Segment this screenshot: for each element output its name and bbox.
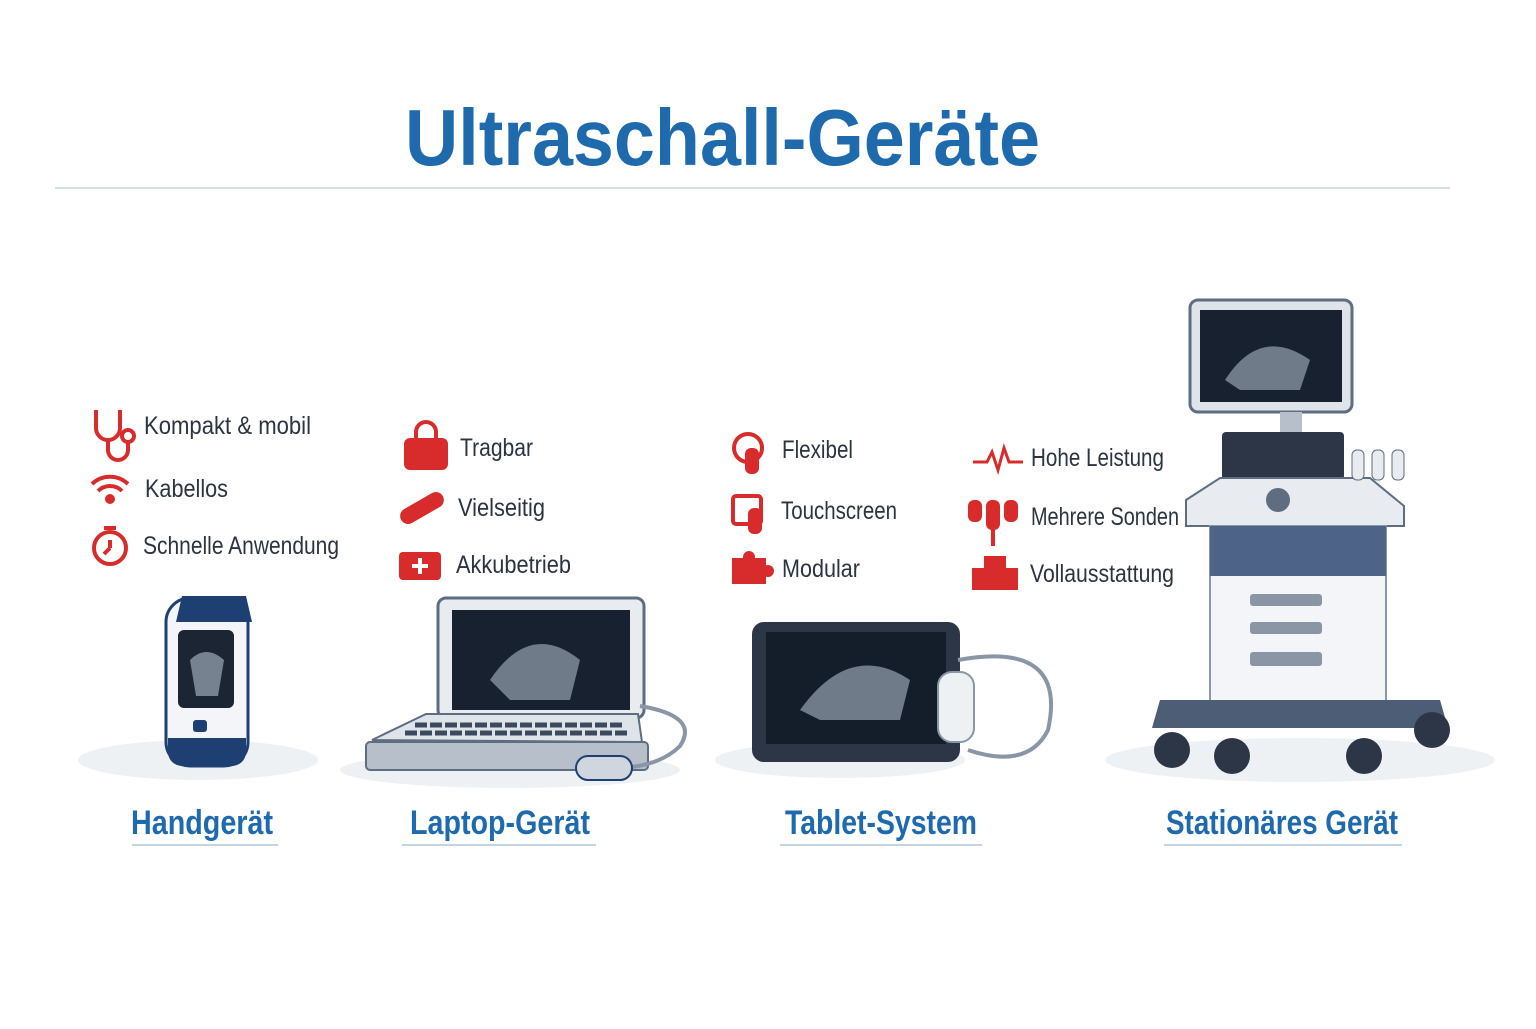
icon: probes: [968, 500, 1018, 546]
panel: Handgerät features: [92, 410, 339, 564]
panel: Stationär features: [968, 444, 1179, 590]
panel: Handgerät features: Kompakt & mobil: [144, 412, 311, 440]
panel: Laptop features: [397, 422, 571, 580]
panel: Stationär features: Hohe Leistung: [1031, 444, 1164, 472]
panel: Laptop features: Vielseitig: [458, 494, 545, 522]
icon: wifi: [92, 477, 128, 502]
icon: bag: [404, 422, 448, 470]
icon: stopwatch: [94, 528, 126, 564]
panel: Laptop features: Akkubetrieb: [456, 551, 571, 579]
panel: Handgerät features: Kabellos: [145, 475, 228, 503]
panel: Tablet features: Touchscreen: [781, 497, 897, 525]
icon: first aid: [399, 552, 441, 580]
icon: touchscreen: [733, 496, 762, 534]
device: handheld: [78, 596, 318, 780]
icon: touch: [734, 434, 762, 474]
label: Tablet-System: Tablet-System: [785, 804, 977, 842]
panel: Handgerät features: Schnelle Anwendung: [143, 532, 339, 560]
label: Handgerät: Handgerät: [131, 804, 273, 842]
icon: puzzle: [732, 551, 774, 584]
icon: probe: [397, 489, 447, 527]
panel: Tablet features: Modular: [782, 555, 860, 583]
label: Laptop-Gerät: Laptop-Gerät: [410, 804, 590, 842]
icon: stethoscope: [96, 410, 134, 460]
title: Ultraschall-Geräte: [405, 93, 1040, 182]
panel: Tablet features: [732, 434, 897, 584]
label: Stationäres Gerät: Stationäres Gerät: [1166, 804, 1398, 842]
panel: Laptop features: Tragbar: [460, 434, 533, 462]
panel: Stationär features: Mehrere Sonden: [1031, 503, 1179, 531]
icon: pulse: [973, 448, 1023, 470]
device: tablet: [715, 622, 1051, 778]
panel: Tablet features: Flexibel: [782, 436, 853, 464]
panel: Stationär features: Vollausstattung: [1030, 560, 1174, 588]
device: laptop: [340, 598, 685, 788]
icon: building: [972, 556, 1018, 590]
device: stationary cart: [1105, 300, 1495, 782]
